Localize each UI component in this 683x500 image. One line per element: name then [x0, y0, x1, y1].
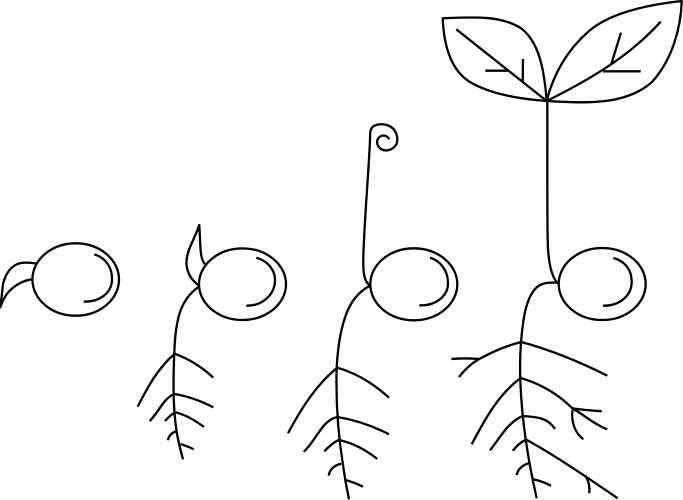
right leaf: [547, 1, 682, 102]
stage 4: seedling with two leaves and branched roots: [443, 1, 682, 498]
stage 2: seed with sprout and young roots: [138, 225, 286, 459]
roots: [520, 283, 558, 498]
left leaf: [443, 17, 547, 101]
stage 1: seed with emerging shoot: [0, 243, 119, 316]
stem: [547, 101, 558, 283]
seed: [559, 248, 646, 320]
stage 3: seed with curled stem and roots: [288, 124, 457, 499]
